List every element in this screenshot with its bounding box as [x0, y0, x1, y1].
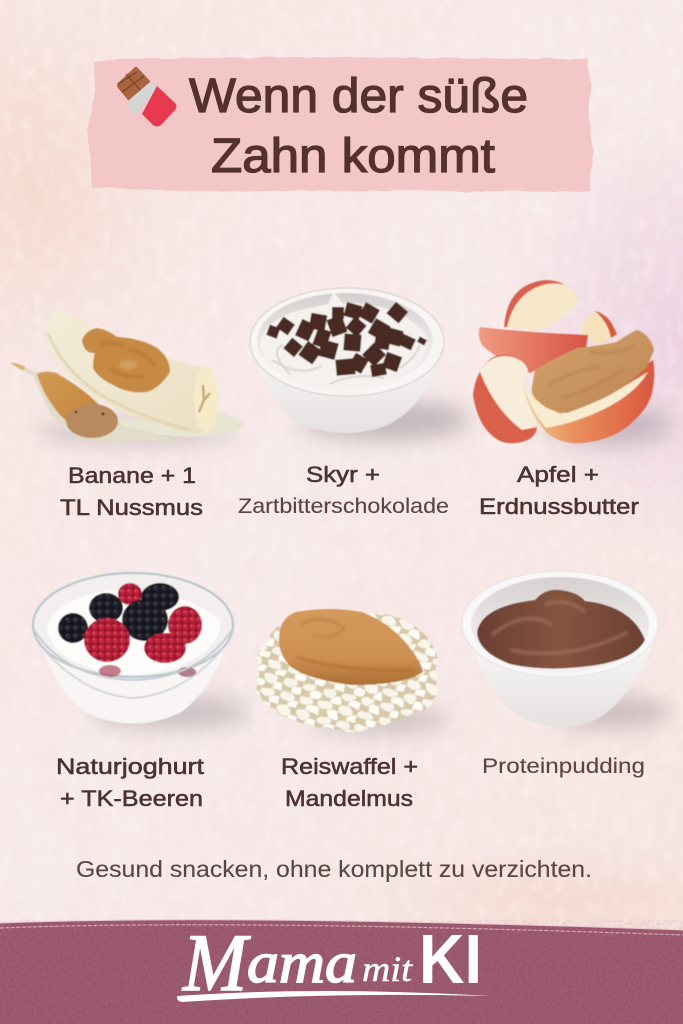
snack: skyr with dark chocolate — [250, 288, 470, 440]
label: apple — [479, 462, 639, 519]
footer band — [0, 917, 683, 1024]
banana body — [45, 309, 218, 434]
title text: Zahn kommt — [211, 130, 495, 183]
apple wedge small — [581, 311, 617, 346]
label: rice cake — [281, 754, 418, 811]
apple slice top — [504, 280, 577, 331]
icon: chocolate bar — [117, 67, 176, 126]
spoon — [8, 361, 188, 447]
pudding — [477, 590, 645, 669]
shadow — [35, 420, 235, 444]
peel — [117, 411, 247, 437]
label: apple: Apfel + — [517, 462, 599, 487]
banana cut end — [194, 367, 218, 433]
label: yoghurt: + TK-Beeren — [60, 786, 203, 811]
apple wedge left — [473, 355, 537, 443]
glass bowl — [40, 640, 228, 724]
yoghurt — [47, 590, 220, 675]
label: rice cake: Mandelmus — [285, 786, 413, 811]
title banner — [87, 57, 593, 191]
label: yoghurt — [56, 754, 204, 811]
peanut butter — [532, 330, 654, 413]
label: banana: TL Nussmus — [60, 495, 203, 520]
label: skyr: Skyr + — [306, 462, 380, 487]
almond butter — [279, 609, 423, 685]
label: skyr: Zartbitterschokolade — [238, 495, 449, 518]
shadow — [550, 696, 670, 728]
label: banana: Banane + 1 — [68, 463, 196, 488]
title text — [189, 70, 528, 183]
shadow — [310, 708, 450, 732]
bowl — [463, 625, 658, 727]
title text: Wenn der süße — [189, 70, 528, 123]
snack: apple with peanut butter — [473, 280, 672, 445]
logo: KI — [419, 920, 482, 998]
bowl — [251, 335, 444, 433]
shadow — [90, 696, 250, 728]
logo: ama — [247, 930, 357, 995]
nut butter — [82, 328, 170, 392]
peanut ball — [66, 404, 118, 438]
banner wash — [87, 57, 593, 191]
shadow — [300, 400, 470, 440]
label: banana — [60, 463, 203, 520]
tagline: Gesund snacken, ohne komplett zu verzichten. — [76, 856, 592, 882]
snack: rice cake with almond butter — [257, 609, 450, 732]
apple wedge back — [479, 327, 588, 373]
logo: M — [182, 917, 251, 1008]
apple wedge main — [523, 360, 654, 443]
chocolate chunks — [266, 302, 427, 377]
shadow — [548, 405, 672, 445]
label: apple: Erdnussbutter — [479, 494, 639, 519]
snack: banana with nut butter — [8, 309, 247, 447]
snack: protein pudding — [462, 571, 670, 728]
label: yoghurt: Naturjoghurt — [56, 754, 204, 779]
logo — [177, 917, 491, 1008]
berries — [58, 583, 202, 677]
glass rim front — [34, 630, 232, 680]
rice cake — [257, 613, 437, 731]
snack: yoghurt with berries — [33, 573, 250, 728]
label: skyr — [238, 462, 449, 518]
label: rice cake: Reiswaffel + — [281, 754, 418, 779]
skyr — [260, 291, 427, 391]
logo: mit — [362, 949, 413, 989]
label: pudding: Proteinpudding — [482, 755, 645, 778]
